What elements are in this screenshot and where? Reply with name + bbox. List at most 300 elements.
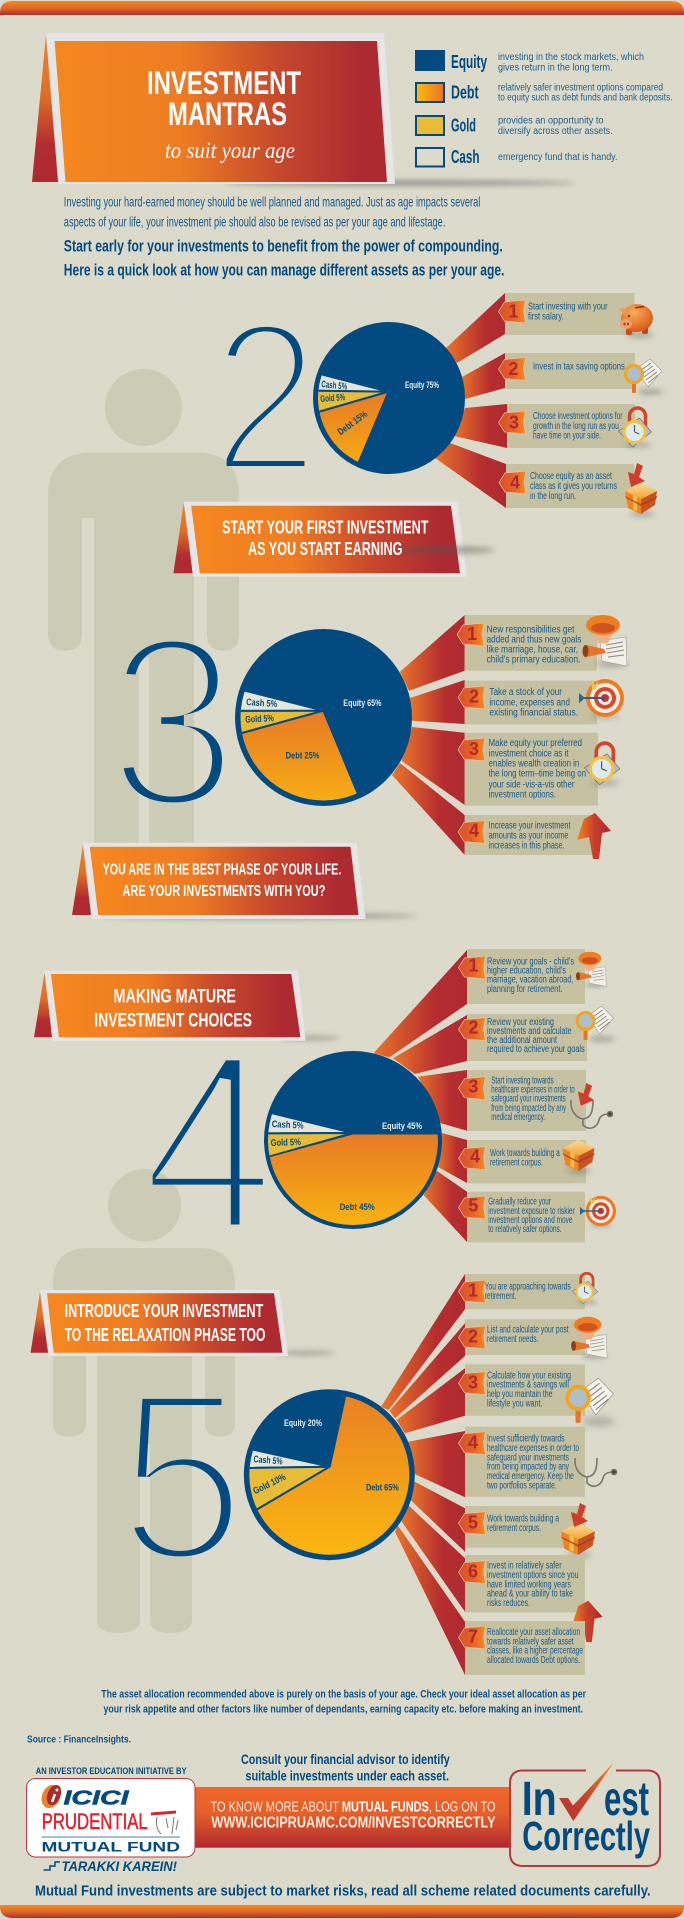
text: investment choice as it — [489, 748, 569, 759]
equity text — [498, 52, 644, 73]
text: Calculate how your existing — [487, 1370, 571, 1381]
text: amounts as your income — [489, 830, 569, 841]
step 1 — [373, 949, 607, 1057]
text: investment options and move — [488, 1215, 573, 1226]
banner: age 40 — [34, 971, 340, 1041]
text — [488, 1197, 575, 1235]
text: class as it gives you returns — [530, 481, 617, 492]
ray — [390, 1323, 465, 1418]
banner frame — [46, 33, 395, 184]
line 1: TO KNOW MORE ABOUT MUTUAL FUNDS, LOG ON TO — [210, 1800, 496, 1816]
step 2 — [393, 1006, 615, 1074]
text: have limited working years — [487, 1579, 571, 1590]
debt label: Debt — [451, 83, 479, 103]
tag — [458, 1196, 486, 1219]
text — [487, 1627, 583, 1666]
text: Increase your investment — [489, 820, 571, 831]
number: 1 — [468, 956, 478, 976]
ray — [410, 1482, 465, 1552]
ray — [435, 443, 506, 508]
text: safeguard your investments — [491, 1094, 566, 1105]
number: 4 — [510, 472, 520, 492]
logo: Invest Correctly — [510, 1762, 660, 1866]
step 2 — [462, 353, 663, 399]
text: to relatively safer options. — [488, 1224, 562, 1235]
advisor note: suitable investments under each asset. — [245, 1768, 449, 1784]
shadow — [275, 1350, 335, 1356]
ray — [418, 1070, 467, 1131]
logo: ICICI Prudential Mutual Fund — [26, 1778, 195, 1874]
label equity: Equity 20% — [284, 1418, 322, 1429]
tag — [498, 300, 526, 323]
step 3 — [418, 1070, 612, 1131]
wedges — [249, 1396, 410, 1555]
shadow — [102, 913, 418, 919]
text: investment options. — [489, 789, 556, 800]
step 3 — [401, 727, 620, 806]
icon: piggy bank — [619, 304, 654, 338]
pie base: equity 45% — [264, 1051, 442, 1229]
number: 1 — [508, 302, 518, 322]
ray — [396, 1368, 465, 1433]
step 4 — [408, 1427, 616, 1497]
ray — [454, 404, 507, 448]
banner fold — [32, 35, 58, 182]
number: 3 — [468, 1372, 478, 1392]
equity text: investing in the stock markets, which — [498, 52, 644, 63]
number: 3 — [509, 412, 519, 432]
bar — [195, 1787, 511, 1848]
text — [487, 957, 574, 995]
box — [467, 1070, 586, 1131]
text — [533, 411, 623, 442]
text — [487, 1370, 571, 1409]
est: est — [604, 1773, 649, 1826]
section 40 steps — [373, 949, 616, 1242]
icon: magnifier and document — [567, 1378, 615, 1426]
box — [505, 353, 635, 389]
icon: up arrow — [577, 813, 611, 859]
ray — [392, 763, 465, 855]
label debt: Debt 25% — [286, 751, 320, 762]
shadow — [280, 1036, 340, 1040]
text — [491, 1075, 575, 1123]
text: risks reduces. — [487, 1598, 530, 1609]
ray — [446, 293, 505, 363]
text: Start investing towards — [491, 1075, 554, 1086]
title line 2: MANTRAS — [168, 96, 287, 132]
silhouette: age 40-50 person — [53, 1169, 235, 1633]
pie chart: age 40 — [264, 1051, 442, 1229]
label cash: Cash 5% — [271, 1119, 304, 1132]
text: retirement. — [485, 1291, 517, 1302]
text: Review your goals - child’s — [487, 957, 574, 968]
text: healthcare expenses in order to — [487, 1443, 579, 1454]
label debt: Debt 15% — [336, 409, 370, 438]
tag — [458, 1512, 486, 1535]
icon: clock lock — [584, 743, 620, 785]
text: Invest sufficiently towards — [487, 1434, 565, 1445]
text — [489, 738, 586, 800]
label debt: Debt 45% — [340, 1202, 375, 1213]
text: from being impacted by any — [487, 1462, 569, 1473]
title line 1: INVESTMENT — [147, 65, 301, 101]
text: enables wealth creation in — [489, 759, 579, 770]
number: 1 — [468, 1281, 478, 1301]
text: allocated towards Debt options. — [487, 1655, 580, 1666]
banner: age 20 — [173, 502, 495, 577]
legend — [415, 50, 672, 167]
number: 6 — [468, 1561, 478, 1581]
text: New responsibilities get — [487, 624, 575, 635]
number: 4 — [469, 821, 479, 841]
ray — [400, 615, 465, 691]
pie base: equity 20% — [244, 1389, 415, 1560]
gold label: Gold — [451, 116, 476, 136]
icon: tick — [559, 1762, 614, 1821]
text: added and thus new goals — [487, 635, 581, 646]
text: Reallocate your asset allocation — [487, 1627, 580, 1638]
text: Make equity your preferred — [489, 738, 582, 749]
tag — [458, 1147, 486, 1170]
advisor note — [241, 1751, 450, 1784]
numeral 2: 2 — [212, 276, 319, 518]
text: higher education, child’s — [487, 966, 566, 977]
text — [487, 1514, 559, 1534]
text: lifestyle you want. — [487, 1398, 542, 1409]
label cash: Cash 5% — [321, 379, 348, 393]
tag — [458, 1326, 486, 1349]
text — [487, 1561, 579, 1609]
text: investment options since you — [487, 1570, 579, 1581]
banner: age 50 — [31, 1290, 335, 1356]
step 6 — [401, 1505, 603, 1642]
text: retirement corpus. — [487, 1523, 541, 1534]
number: 3 — [469, 739, 479, 759]
label cash: Cash 5% — [253, 1454, 283, 1468]
line 2: TO THE RELAXATION PHASE TOO — [65, 1325, 265, 1345]
frame — [40, 1290, 288, 1356]
ray — [424, 1171, 467, 1242]
box — [465, 1319, 585, 1355]
number: 3 — [468, 1077, 478, 1097]
text: retirement corpus. — [490, 1157, 543, 1168]
icon: clock lock — [618, 408, 652, 448]
title banner — [32, 33, 575, 186]
text: required to achieve your goals — [487, 1044, 585, 1055]
box — [505, 293, 634, 335]
ray — [381, 1274, 465, 1410]
text: first salary. — [528, 311, 564, 322]
line 1: YOU ARE IN THE BEST PHASE OF YOUR LIFE. — [103, 861, 341, 878]
number: 4 — [470, 1146, 480, 1166]
number: 2 — [468, 1017, 478, 1037]
gold text: provides an opportunity to — [498, 116, 604, 127]
step 4 — [435, 443, 657, 516]
section 50 steps — [381, 1273, 616, 1675]
tag — [458, 1432, 486, 1455]
step 1 — [400, 615, 628, 691]
text: safeguard your investments — [487, 1452, 569, 1463]
step 5 — [410, 1482, 595, 1558]
Prudential wordmark: PRUDENTIAL — [42, 1809, 148, 1834]
box — [507, 404, 635, 448]
text — [489, 687, 578, 719]
text — [490, 1148, 560, 1168]
box — [465, 615, 597, 671]
ray — [373, 950, 467, 1057]
line 1: MAKING MATURE — [114, 987, 236, 1008]
icon: target — [580, 1196, 616, 1227]
text: Review your existing — [487, 1017, 554, 1028]
shadow — [395, 546, 495, 554]
disclaimer — [101, 1688, 587, 1716]
text: Gradually reduce your — [488, 1197, 551, 1208]
logo box — [26, 1778, 195, 1857]
text — [487, 1434, 579, 1491]
text: Choose equity as an asset — [530, 471, 612, 482]
gold swatch — [416, 116, 444, 135]
tag — [458, 1626, 486, 1649]
panel — [90, 847, 359, 915]
wedges — [268, 1113, 438, 1225]
icon: stethoscope — [575, 1458, 616, 1486]
step 4 — [392, 763, 611, 859]
divider — [42, 1836, 180, 1838]
ray — [401, 1505, 465, 1612]
pie base: equity 65% — [235, 629, 412, 806]
text: marriage, vacation abroad, — [487, 975, 573, 986]
text: medical emergency. Keep the — [487, 1471, 574, 1482]
text: List and calculate your post — [487, 1325, 569, 1336]
number: 7 — [468, 1627, 478, 1647]
tag — [458, 956, 486, 979]
tag — [458, 738, 485, 761]
ICICI wordmark: ICICI — [64, 1788, 129, 1810]
section 20 steps — [435, 293, 663, 516]
box — [465, 1555, 585, 1612]
step 2 — [390, 1317, 608, 1418]
label equity: Equity 65% — [343, 698, 382, 709]
text: retirement needs. — [487, 1334, 538, 1345]
text: income, expenses and — [489, 697, 570, 708]
box — [465, 1427, 585, 1497]
text — [487, 624, 581, 666]
text: the long term–time being on — [489, 769, 586, 780]
intro text: Start early for your investments to benefit from the power of compounding. — [64, 237, 503, 256]
icon: clock lock — [572, 1273, 598, 1304]
icon: steps — [44, 1862, 60, 1870]
tag — [499, 471, 526, 494]
banner shadow — [225, 180, 575, 186]
frame — [83, 843, 366, 919]
text: your side -vis-a-vis other — [489, 779, 575, 790]
label gold: Gold 5% — [270, 1137, 302, 1149]
icon: stamp and paper — [582, 615, 628, 667]
cash text: emergency fund that is handy. — [498, 152, 618, 163]
text: existing financial status. — [489, 708, 578, 719]
icon: Prudence head — [151, 1812, 178, 1834]
box — [467, 1140, 586, 1183]
In: In — [522, 1773, 557, 1826]
step 1 — [381, 1273, 598, 1410]
icon: box — [562, 1140, 594, 1174]
cash label: Cash — [451, 147, 480, 167]
text: investment exposure to riskier — [488, 1206, 575, 1217]
fold — [31, 1292, 48, 1353]
wedges — [318, 375, 387, 462]
section 30 steps — [392, 615, 628, 859]
step 7 — [395, 1525, 585, 1675]
text: two portfolios separate. — [487, 1480, 557, 1491]
ray — [395, 1525, 465, 1675]
text: the additional amount — [487, 1035, 557, 1046]
step 4 — [438, 1133, 594, 1183]
Mutual Fund wordmark: MUTUAL FUND — [42, 1839, 180, 1855]
text: Take a stock of your — [489, 687, 563, 698]
box — [467, 949, 585, 1004]
text: healthcare expenses in order to — [491, 1085, 575, 1096]
text — [487, 1325, 569, 1345]
panel — [51, 974, 300, 1037]
number: 2 — [468, 1326, 478, 1346]
numeral 4: 4 — [142, 1000, 276, 1286]
tag — [458, 1077, 486, 1100]
text — [487, 1017, 585, 1055]
tag — [498, 411, 526, 434]
tag — [458, 1372, 486, 1395]
logo icon — [38, 1782, 64, 1811]
text — [489, 820, 571, 852]
label debt: Debt 65% — [366, 1483, 399, 1494]
line 1: START YOUR FIRST INVESTMENT — [222, 517, 429, 537]
fold — [173, 503, 193, 573]
banner: age 30 — [72, 843, 418, 919]
frame — [184, 502, 467, 577]
tagline: TARAKKI KAREIN! — [62, 1859, 177, 1874]
silhouette: age 20-30 person — [48, 369, 239, 857]
logo box — [510, 1770, 660, 1866]
frame — [44, 971, 306, 1041]
text — [485, 1281, 571, 1302]
ray — [462, 353, 505, 399]
tag — [498, 358, 526, 380]
panel — [47, 1293, 282, 1353]
ray — [408, 1431, 465, 1497]
icon: stamp and paper — [576, 952, 607, 987]
number: 4 — [468, 1432, 478, 1452]
text: classes, like a higher percentage — [487, 1646, 583, 1657]
text: increases in this phase. — [489, 841, 565, 852]
tag — [458, 1018, 486, 1041]
ray — [438, 1133, 467, 1183]
tag — [458, 686, 485, 709]
text: You are approaching towards — [485, 1281, 571, 1292]
equity text: gives return in the long term. — [498, 62, 613, 73]
icon: arrow and stethoscope — [571, 1083, 612, 1128]
label gold: Gold 10% — [251, 1472, 288, 1497]
box — [465, 1364, 585, 1416]
fold — [34, 973, 52, 1037]
icon: stamp and paper — [571, 1317, 608, 1359]
source: Source : FinanceInsights. — [27, 1734, 131, 1745]
pie chart: age 50 — [244, 1389, 415, 1560]
tag — [457, 623, 484, 646]
box — [467, 1192, 585, 1242]
text — [528, 301, 608, 322]
line 2: ARE YOUR INVESTMENTS WITH YOU? — [122, 883, 325, 900]
icon: up arrow — [572, 1601, 603, 1642]
wedges — [240, 690, 358, 800]
number: 5 — [468, 1512, 478, 1532]
text: ahead & your ability to take — [487, 1589, 573, 1600]
label gold: Gold 5% — [320, 392, 346, 405]
icon: target — [579, 679, 624, 718]
panel — [191, 506, 460, 573]
number: 5 — [468, 1196, 478, 1216]
pie chart: age 30 — [235, 629, 412, 806]
tag — [458, 820, 485, 844]
box — [467, 1014, 587, 1061]
initiative caption: AN INVESTOR EDUCATION INITIATIVE BY — [36, 1766, 186, 1776]
text: in the long run. — [530, 491, 576, 502]
text: help you maintain the — [487, 1389, 553, 1400]
step 3 — [454, 404, 652, 448]
step 2 — [410, 679, 624, 724]
tag — [458, 1561, 486, 1584]
text: Invest in relatively safer — [487, 1561, 562, 1572]
advisor note: Consult your financial advisor to identify — [241, 1751, 450, 1767]
text: towards relatively safer asset — [487, 1636, 574, 1647]
pie base: equity 75% — [313, 322, 465, 474]
text: child’s primary education. — [487, 655, 580, 666]
box — [465, 815, 595, 855]
debt text — [498, 82, 672, 104]
gold text — [498, 116, 613, 137]
step 3 — [396, 1364, 615, 1433]
text: Invest in tax saving options. — [533, 361, 627, 372]
box — [465, 1506, 585, 1548]
numeral 3: 3 — [108, 585, 238, 858]
intro text: Here is a quick look at how you can manage different assets as per your age. — [64, 260, 504, 279]
equity label: Equity — [451, 52, 487, 72]
text: investments and calculate — [487, 1026, 572, 1037]
step 5 — [424, 1171, 616, 1242]
call to action bar — [195, 1787, 511, 1848]
cash swatch — [416, 148, 444, 166]
icon: magnifier and document — [577, 1006, 615, 1042]
bottom bar — [0, 1905, 684, 1918]
box — [465, 1274, 585, 1309]
text: Work towards building a — [490, 1148, 560, 1159]
ray — [410, 680, 465, 724]
text: have time on your side. — [533, 431, 601, 442]
text: Choose investment options for — [533, 411, 623, 422]
fold — [72, 845, 91, 915]
equity swatch — [415, 50, 445, 71]
line 1: INTRODUCE YOUR INVESTMENT — [65, 1301, 263, 1321]
number: 2 — [469, 687, 479, 707]
label gold: Gold 5% — [245, 713, 275, 726]
banner panel — [55, 41, 387, 182]
line 2: INVESTMENT CHOICES — [94, 1011, 252, 1032]
number: 1 — [467, 624, 477, 644]
text — [530, 471, 617, 502]
ray — [393, 1015, 467, 1074]
box — [465, 1621, 585, 1675]
line 2: WWW.ICICIPRUAMC.COM/INVESTCORRECTLY — [211, 1815, 496, 1832]
top bar — [0, 1, 684, 15]
